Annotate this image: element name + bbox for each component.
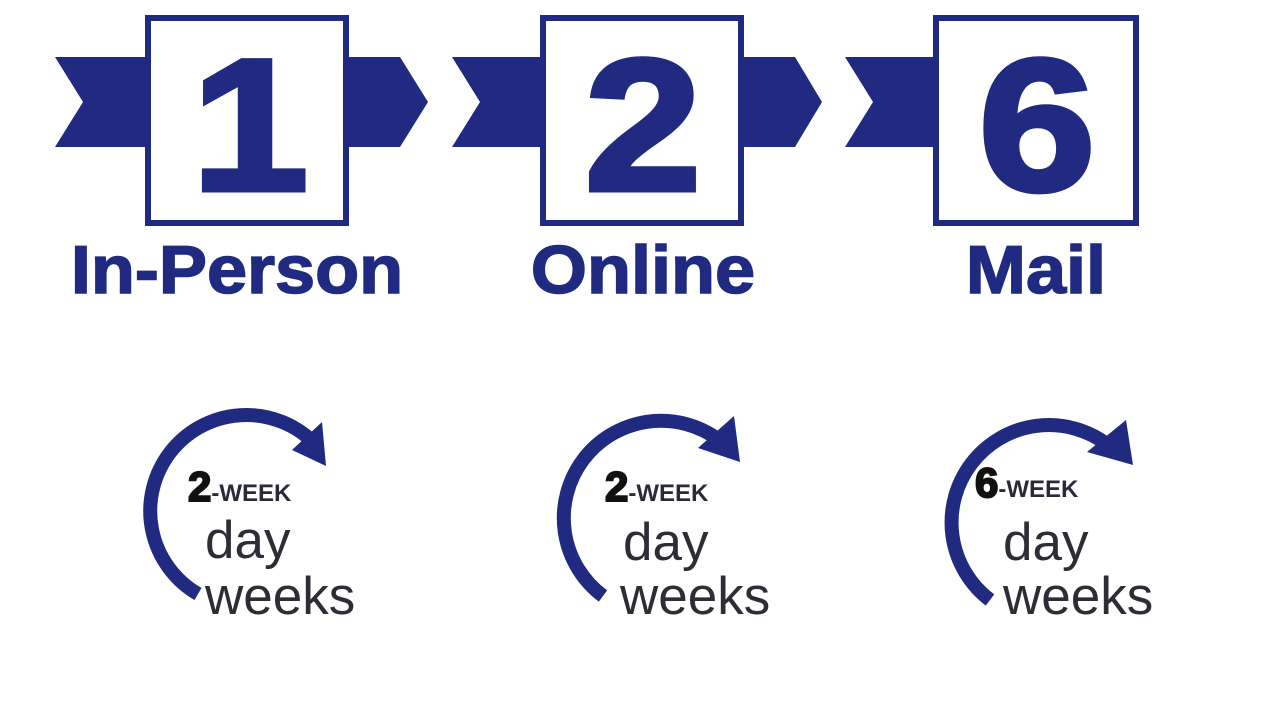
number 2: 2: [584, 20, 702, 231]
number box 1: [148, 18, 346, 223]
ribbon right arrow 1: [346, 57, 428, 147]
number box 2: [543, 18, 741, 223]
text day weeks: day: [623, 513, 709, 572]
timing 1: weeks: [204, 567, 355, 626]
circular arrow 2: [564, 416, 740, 596]
text 6-week: 6-WEEK: [975, 459, 1079, 506]
step 2: online: [452, 18, 822, 308]
text day weeks: day: [1003, 513, 1089, 572]
number 6: 6: [978, 20, 1096, 231]
text 2-week: 2-WEEK: [188, 463, 292, 510]
timing 3: weeks: [1002, 567, 1153, 626]
number 1: 1: [191, 20, 309, 231]
text 2-week: 2-WEEK: [605, 463, 709, 510]
circular arrow 3: [952, 420, 1133, 600]
label Online: Online: [531, 232, 755, 308]
circular arrow 1: [150, 415, 326, 594]
timing 1: [150, 415, 355, 626]
step 3: mail: [845, 18, 1136, 308]
timing 2: weeks: [619, 567, 770, 626]
timing 3: [952, 420, 1153, 626]
label In-Person: In-Person: [71, 232, 403, 308]
number box 3: [936, 18, 1136, 223]
ribbon left 1: [55, 57, 148, 147]
ribbon right arrow 2: [740, 57, 822, 147]
ribbon left 2: [452, 57, 543, 147]
timing 2: [564, 416, 770, 626]
ribbon left 3: [845, 57, 936, 147]
text day weeks: day: [205, 511, 291, 570]
step 1: in-person: [55, 18, 428, 308]
label Mail: Mail: [966, 232, 1106, 308]
